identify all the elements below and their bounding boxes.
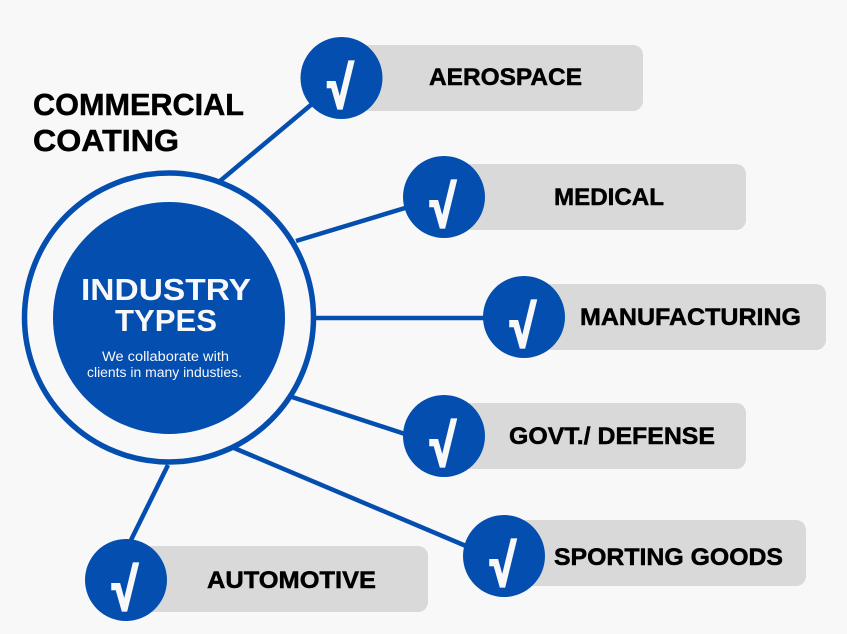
central description: We collaborate with [102, 349, 229, 364]
item: manufacturing: √ [510, 295, 536, 360]
title: COATING [33, 123, 179, 158]
item: aerospace: AEROSPACE [429, 64, 582, 91]
item: sporting goods: SPORTING GOODS [554, 544, 783, 571]
central heading: TYPES [115, 303, 217, 338]
item: medical: MEDICAL [554, 184, 664, 211]
item: automotive [85, 539, 428, 623]
central circle [24, 173, 314, 462]
item: medical: √ [430, 175, 456, 240]
item: sporting goods [463, 515, 806, 599]
item: aerospace: √ [328, 56, 353, 121]
item: govt defense: √ [430, 414, 456, 479]
item: automotive: √ [112, 558, 138, 623]
item: manufacturing: MANUFACTURING [580, 304, 801, 331]
title [33, 87, 244, 158]
central heading: INDUSTRY [81, 272, 251, 307]
central description [87, 349, 242, 380]
item: manufacturing [483, 276, 826, 360]
item: govt defense: GOVT./ DEFENSE [509, 423, 715, 450]
connector lines [131, 104, 484, 546]
item: govt defense [403, 395, 746, 479]
item: automotive: AUTOMOTIVE [207, 567, 376, 594]
item: medical [403, 156, 746, 240]
item: sporting goods: √ [490, 534, 516, 599]
central heading [81, 272, 251, 338]
central description: clients in many industies. [87, 365, 242, 380]
item: aerospace [300, 37, 643, 121]
title: COMMERCIAL [33, 87, 244, 122]
